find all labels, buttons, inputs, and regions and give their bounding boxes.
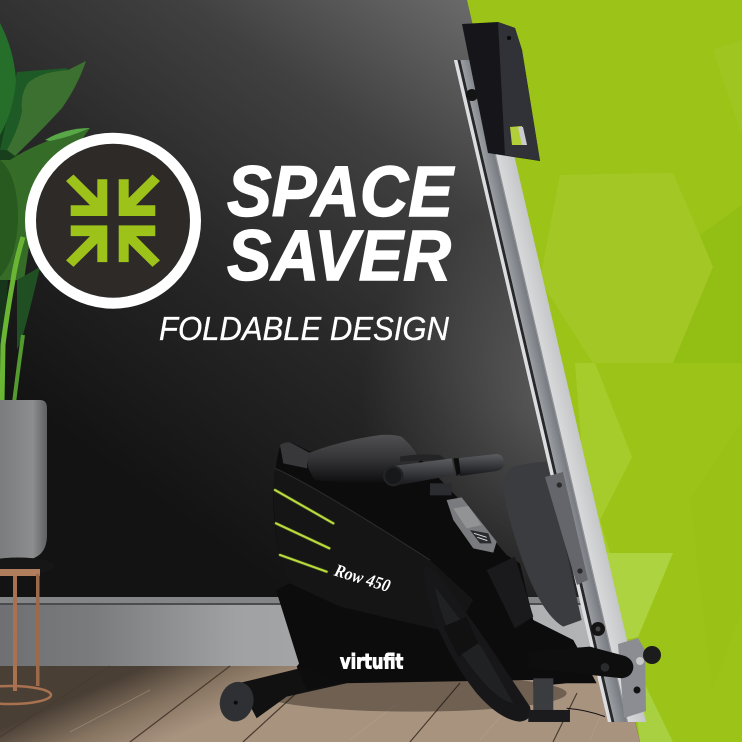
icon: four inward arrows [66, 174, 160, 267]
handle bar [383, 454, 504, 495]
housing bevel line [275, 468, 430, 560]
heading: space saver: SPACE [227, 153, 455, 232]
seat [503, 462, 588, 627]
model name: Row 450 [331, 560, 393, 596]
housing upper shell [274, 468, 473, 633]
wooden floor [0, 666, 640, 742]
footplate [423, 567, 531, 722]
heading: space saver: SAVER [227, 217, 451, 296]
rail screws [466, 89, 605, 636]
potted plant [0, 23, 90, 704]
icon: compress arrows badge [30, 138, 196, 303]
copper plant stand [0, 558, 54, 704]
rear clamp and knob [618, 638, 661, 718]
resistance knob [487, 557, 533, 628]
subheading: foldable design: FOLDABLE DESIGN [159, 310, 449, 347]
hood rear rim [280, 442, 311, 468]
cable [567, 708, 605, 717]
rowing machine [215, 435, 633, 725]
brand name: virtufit [340, 650, 404, 674]
aluminium rail [454, 60, 646, 722]
skirting board [0, 597, 622, 666]
front stabiliser [215, 650, 357, 725]
cross bar and post [528, 647, 633, 722]
machine shadow [260, 675, 567, 712]
badge circle [30, 138, 196, 303]
lime stripes [275, 490, 333, 572]
console [447, 497, 497, 553]
rail end cap [462, 22, 540, 161]
flywheel housing [273, 435, 597, 687]
plant pot [0, 400, 47, 561]
plant leaves [0, 23, 90, 403]
heading: space saver [227, 153, 455, 296]
grey hood [307, 435, 420, 483]
